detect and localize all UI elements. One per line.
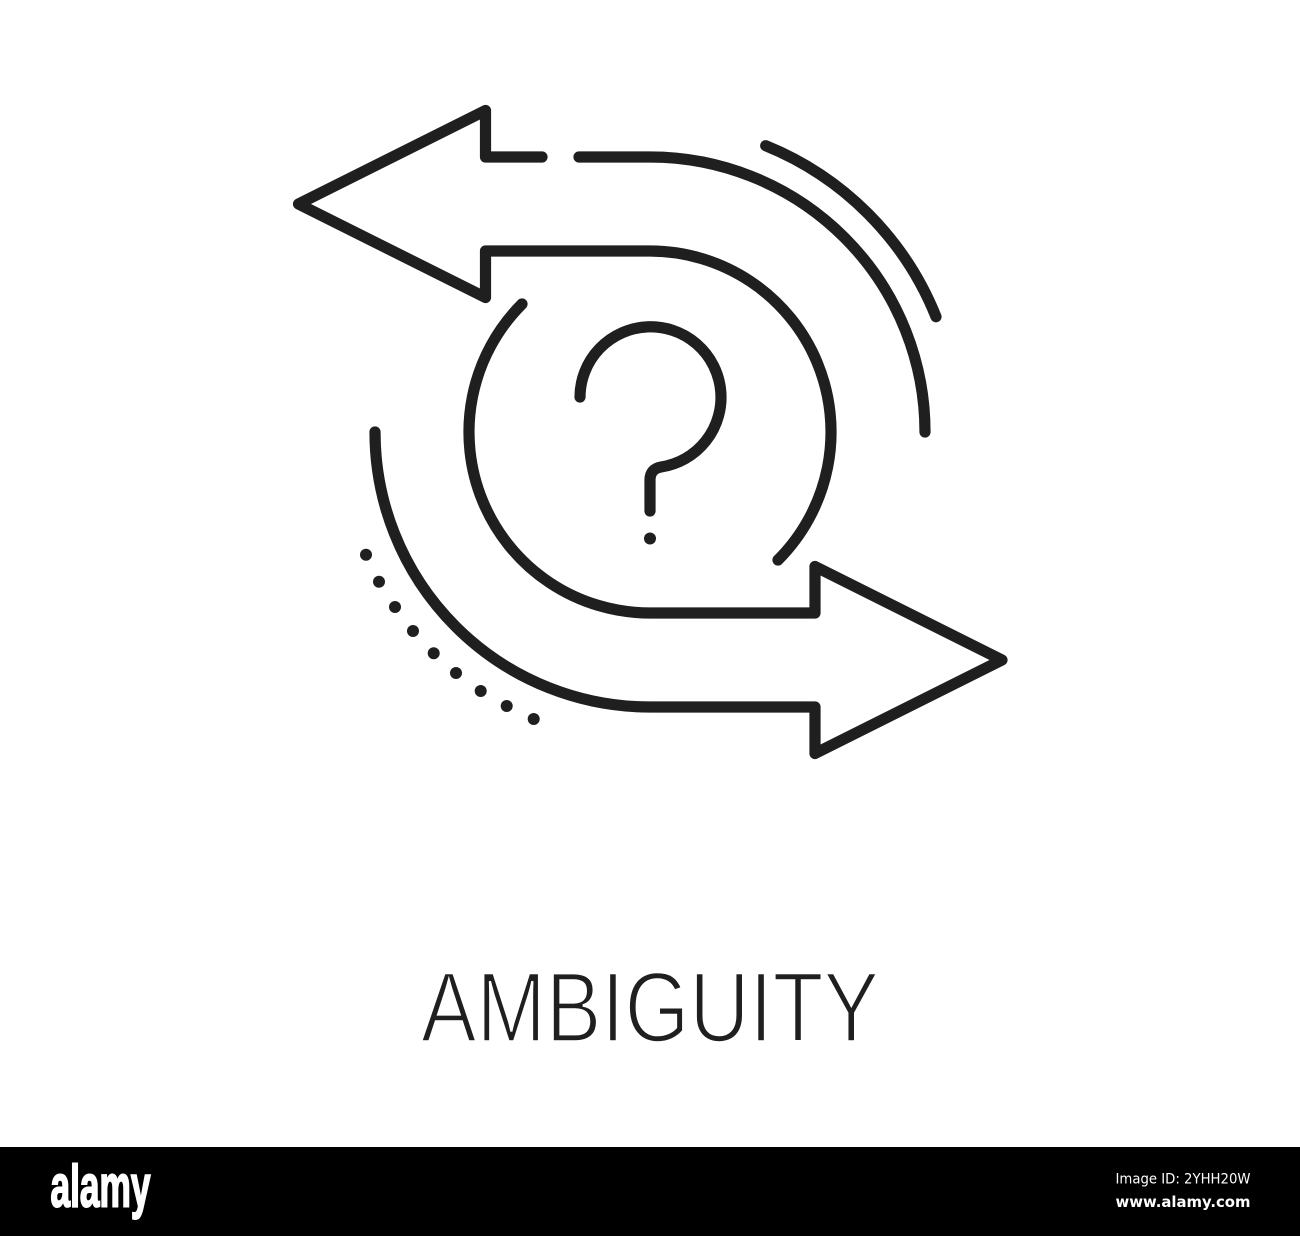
image id: Image ID: 2YHH20W <box>1116 1171 1250 1187</box>
icon: question mark <box>580 327 721 544</box>
brand logo: alamy <box>50 1154 151 1220</box>
title: AMBIGUITY <box>421 952 879 1063</box>
icon: dotted arc <box>360 549 540 725</box>
black stock banner <box>0 1147 1300 1236</box>
website: www.alamy.com <box>1116 1193 1250 1211</box>
icon: top left arrow <box>298 110 936 560</box>
icon: bottom right arrow <box>375 304 1002 754</box>
